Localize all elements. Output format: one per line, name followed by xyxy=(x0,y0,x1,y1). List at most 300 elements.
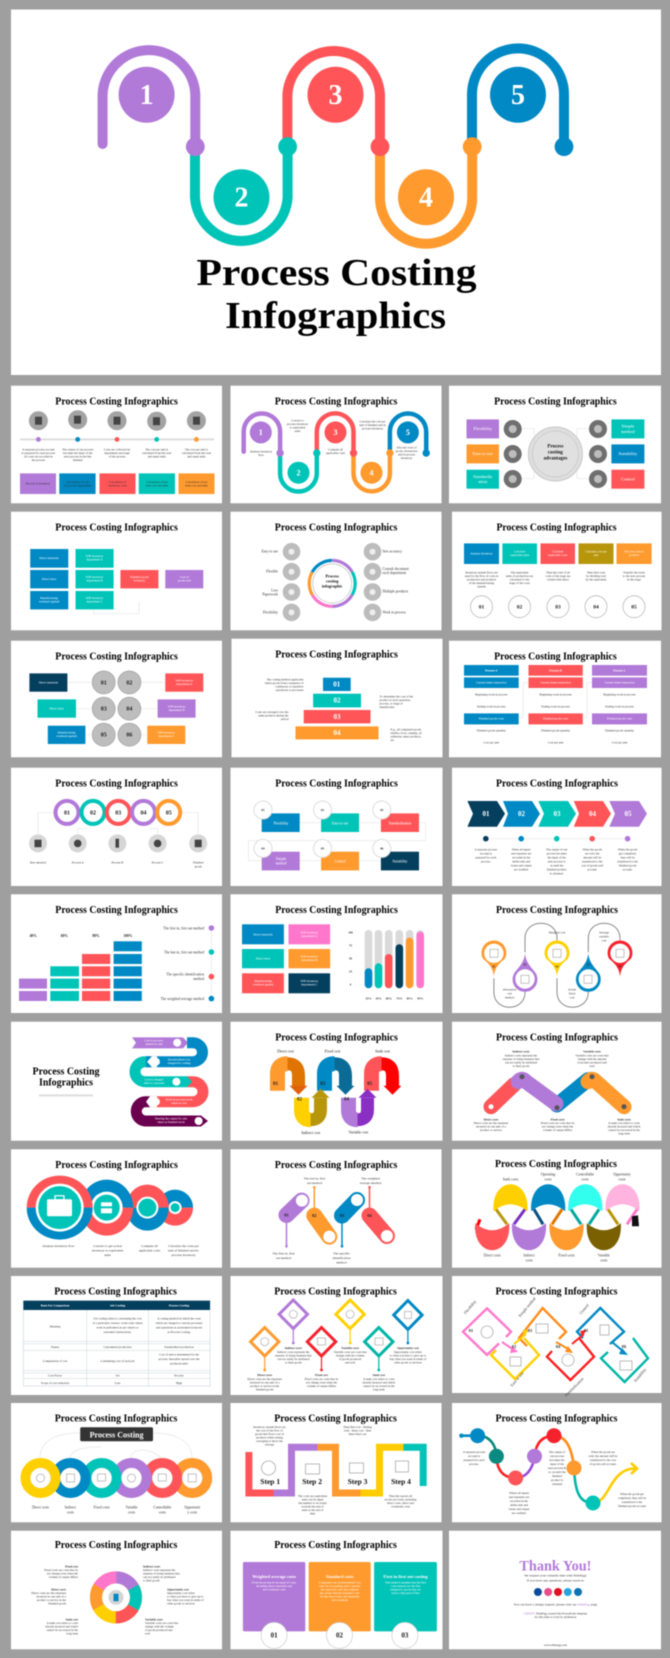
panel: comparison table xyxy=(11,1276,222,1395)
descriptions: and equal units xyxy=(187,455,206,459)
panel: linked rings xyxy=(11,768,222,886)
left boxes: ation xyxy=(478,479,488,484)
top row boxes xyxy=(262,813,419,832)
heading: Process Costing Infographics xyxy=(55,396,178,407)
colored boxes: Record of inventory xyxy=(26,482,51,486)
descriptions: Direct costs are the expenses xyxy=(247,1377,283,1381)
pin numbers: 02 xyxy=(524,962,527,966)
right boxes: department B xyxy=(168,708,185,712)
labels xyxy=(484,1172,631,1262)
text blocks: bottom: product or service xyxy=(480,1128,502,1132)
card 2: Standard costs xyxy=(326,1574,354,1579)
text blocks: top: Variable costs xyxy=(583,1050,602,1054)
purple arrow xyxy=(132,1037,188,1048)
top row boxes: Standardization xyxy=(389,822,411,826)
descriptions xyxy=(247,1346,427,1392)
step notes: average xyxy=(265,1442,275,1446)
step labels: to equivalent xyxy=(290,426,305,430)
left notes: where goods from a sequence of xyxy=(265,681,304,685)
cost labels: Fixed cost xyxy=(325,1050,341,1054)
descriptions: prepared for each xyxy=(475,856,497,860)
descriptions xyxy=(475,848,639,876)
ribbon icons xyxy=(488,1074,626,1110)
labels: costs xyxy=(544,1177,552,1181)
multicolor ring xyxy=(309,560,355,606)
up arrowheads xyxy=(312,1089,376,1098)
pill numbers: 02 xyxy=(312,1213,317,1218)
WIP boxes: WIP inventory xyxy=(86,575,104,579)
credit note xyxy=(524,1612,588,1619)
connectors xyxy=(519,683,592,718)
step labels xyxy=(250,419,418,460)
ribbon numbers: 01 xyxy=(273,1082,278,1087)
left labels: Flexible xyxy=(266,570,278,574)
column: process A: Process A xyxy=(485,669,498,673)
descriptions: as until the xyxy=(550,864,564,868)
text blocks: top: Indirect costs xyxy=(512,1050,530,1054)
path notes: product is xyxy=(551,1478,564,1482)
ring labels: Variable xyxy=(126,1506,138,1510)
pill 02 xyxy=(313,1186,335,1243)
cost of goods box: goods sold xyxy=(178,579,191,583)
hero path: orange arch xyxy=(380,147,472,244)
finished goods box xyxy=(120,570,158,588)
right boxes: department C xyxy=(158,734,174,738)
step notes: these final cost xyxy=(348,1432,367,1436)
pin: red xyxy=(608,940,632,977)
heading: Process Costing Infographics xyxy=(496,522,617,533)
ring caption: infographic xyxy=(322,584,343,589)
left text blocks: cannot be recovered in the xyxy=(46,1628,79,1632)
text blocks: bottom: Direct costs are the expenses xyxy=(474,1121,509,1125)
panel: domes and bowls xyxy=(452,1149,662,1268)
number medallions: 02 xyxy=(336,1632,344,1640)
pin numbers: 01 xyxy=(492,964,496,968)
bar chart: 85% xyxy=(407,996,413,1000)
table rows: process, thereafter spread over the xyxy=(158,1357,200,1362)
chevrons: 03 xyxy=(554,810,561,818)
right text blocks: buy what you want in terms of xyxy=(167,1598,204,1602)
heading xyxy=(32,1067,100,1089)
descriptions: Direct costs xyxy=(257,1373,273,1377)
rotated labels: Control xyxy=(578,1302,590,1315)
left text blocks: Fixed cost xyxy=(65,1565,78,1569)
card 2: the actual with the standard costs xyxy=(320,1591,360,1595)
descriptions: incurred on one unit of a xyxy=(250,1380,280,1384)
icons xyxy=(481,1324,632,1370)
winding path xyxy=(244,413,426,492)
text blocks: top: Variable costs are costs that xyxy=(575,1054,609,1058)
descriptions: used for the flow of costs in xyxy=(465,574,499,578)
rotated labels: Flexibility xyxy=(463,1299,477,1315)
path nodes xyxy=(459,1428,600,1510)
descriptions: Variable costs xyxy=(341,1346,360,1350)
right notes xyxy=(380,695,422,742)
path notes: Where all inputs xyxy=(509,1491,530,1495)
left boxes: Manufacturing xyxy=(58,731,76,735)
card 2: and overhead xyxy=(332,1598,348,1602)
descriptions: the process xyxy=(32,458,46,462)
panel: connected diamonds xyxy=(230,1276,442,1395)
step 1 badge xyxy=(119,67,175,123)
column: process A: Beginning work in process xyxy=(475,693,508,697)
heading: Process Costing Infographics xyxy=(55,1413,177,1424)
panel: folded arrows xyxy=(230,1022,442,1141)
colored boxes xyxy=(20,473,214,494)
input boxes: Manufacturing xyxy=(40,596,58,600)
hero path nodes xyxy=(186,137,573,156)
finished goods box: Finished goods xyxy=(130,575,149,579)
left boxes: Direct labor xyxy=(256,956,270,960)
chevrons: 04 xyxy=(589,810,596,818)
ribbon numbers: 03 xyxy=(320,1082,326,1087)
lower diamonds xyxy=(250,1328,393,1356)
descriptions: already incurred and which xyxy=(362,1380,396,1384)
column: process A xyxy=(464,665,519,745)
table rows: produced units xyxy=(170,1362,189,1366)
descriptions: and equal units xyxy=(148,455,167,459)
colored header boxes: Allocate costs to xyxy=(624,550,644,554)
path notes: completed, they will be xyxy=(618,1496,647,1501)
right text blocks: expense of doing business that xyxy=(143,1572,180,1576)
descriptions: amount will be xyxy=(583,856,602,860)
left text blocks: Direct costs xyxy=(51,1588,67,1592)
column: process C: Process C xyxy=(613,669,626,673)
path notes: obtained xyxy=(552,1482,563,1486)
diamond outlines xyxy=(463,1308,648,1382)
heading: Process Costing Infographics xyxy=(55,905,178,916)
percent labels xyxy=(30,934,133,938)
pyramid tiers: 03 xyxy=(334,713,341,721)
hero title xyxy=(196,252,476,337)
left boxes: overhead applied xyxy=(253,982,274,986)
descriptions: A separate process xyxy=(475,848,498,852)
bar chart: 50 xyxy=(349,957,352,961)
panel: pyramid xyxy=(232,639,442,757)
pill 01 xyxy=(285,1195,308,1248)
pin labels: Marginal cost xyxy=(549,930,565,934)
bottom row boxes: method xyxy=(276,862,287,866)
descriptions: is prepared for each process xyxy=(22,451,56,455)
upper diamonds xyxy=(279,1300,422,1330)
path notes: input of the xyxy=(550,1462,565,1466)
bar chart: 25% xyxy=(366,996,372,1000)
descriptions: can not easily be attributed xyxy=(277,1357,310,1361)
step labels: unit of finished and in xyxy=(359,423,386,427)
descriptions: product or service in the xyxy=(250,1384,280,1388)
step labels: Compute all xyxy=(328,448,343,452)
descriptions: cannot be recovered in the xyxy=(363,1384,395,1388)
colored header boxes: Calculate xyxy=(514,550,526,554)
pin: blue xyxy=(576,953,601,992)
right labels xyxy=(382,550,409,615)
website: www.slideegg.com xyxy=(544,1643,568,1647)
heading: Process Costing Infographics xyxy=(495,1159,617,1170)
table rows: Cost of unit is determined for the xyxy=(159,1352,200,1356)
pill labels xyxy=(272,1176,382,1264)
table rows: customer's instructions. xyxy=(103,1330,132,1334)
text blocks: bottom: incurred on one unit of a xyxy=(476,1125,506,1129)
path notes: finished goods account xyxy=(618,1504,646,1508)
number badges: 06 xyxy=(380,847,384,851)
table rows: and operations is ascertained is known xyxy=(156,1326,203,1330)
pin: purple xyxy=(513,953,537,992)
captions: Analyze inventory flow xyxy=(42,1244,75,1248)
table rows xyxy=(41,1316,203,1385)
left text blocks: not change even when the xyxy=(47,1572,79,1576)
descriptions: finished goods xyxy=(256,1388,274,1392)
text blocks: top: can not easily be attributed xyxy=(505,1061,538,1065)
column: process B: Process B xyxy=(549,669,562,673)
gray icon circles xyxy=(283,543,381,621)
pyramid tiers: 04 xyxy=(334,729,341,737)
colored header boxes: Analyze inventory xyxy=(470,552,493,556)
column: process C: Beginning work in process xyxy=(603,693,636,697)
number badges: 2 xyxy=(296,469,300,478)
table header: Process Costing xyxy=(169,1304,190,1308)
chevrons: 01 xyxy=(482,810,490,818)
ring labels: costs xyxy=(128,1510,136,1514)
number badges: 5 xyxy=(406,428,410,437)
captions: inventory to equivalent xyxy=(92,1248,123,1252)
heading: Process Costing Infographics xyxy=(496,1413,618,1424)
bar chart: 25 xyxy=(349,970,352,974)
ring labels: Indirect xyxy=(65,1506,76,1510)
colored boxes: Calculation of xyxy=(109,480,126,484)
center circle: advantages xyxy=(543,457,567,462)
descriptions: debits side and xyxy=(512,860,531,864)
step notes: time xyxy=(310,1512,316,1516)
WIP boxes: department B xyxy=(86,579,103,583)
numbers: 06 xyxy=(622,1344,627,1349)
right boxes: department B xyxy=(301,958,317,962)
descriptions: to what you have to give up to xyxy=(390,1354,427,1358)
WIP boxes: department A xyxy=(86,558,103,562)
input boxes: overhead applied xyxy=(39,600,60,604)
pill labels: The weighted xyxy=(361,1176,380,1180)
card 3: costs entered are the first xyxy=(390,1584,421,1588)
panel: interlocked rings xyxy=(11,1403,222,1522)
ring centers xyxy=(30,1468,202,1488)
cost labels: Indirect cost xyxy=(301,1131,321,1135)
left text blocks: already incurred and which xyxy=(45,1625,78,1629)
right labels: Multiple products xyxy=(382,590,409,594)
top row boxes: Flexibility xyxy=(274,822,289,826)
stacked block chart xyxy=(19,941,142,1001)
white step circles xyxy=(152,1039,203,1125)
ribbon captions: related by unit xyxy=(145,1042,163,1046)
number medallions: 03 xyxy=(401,1632,409,1640)
pin numbers: 05 xyxy=(618,964,622,968)
colored header boxes: Calculate xyxy=(552,550,564,554)
left text blocks: A sunk cost refers to costs xyxy=(47,1621,79,1625)
pin labels: Absorption xyxy=(503,987,517,991)
path notes: and expenses are xyxy=(509,1495,530,1499)
step notes xyxy=(253,1425,417,1516)
heading: Process Costing Infographics xyxy=(494,396,617,407)
step 4 badge: 4 xyxy=(419,183,433,214)
pin numbers: 04 xyxy=(587,962,590,966)
left text blocks: Sunk cost xyxy=(66,1618,78,1622)
descriptions: costs of the stage are xyxy=(546,574,571,578)
panel: teardrop pins xyxy=(452,894,662,1013)
step 5 badge: 5 xyxy=(511,80,525,111)
right boxes: WIP inventory xyxy=(300,930,319,934)
heading: Infographics xyxy=(39,1078,93,1089)
number badges: 01 xyxy=(261,808,265,812)
numbers: 03 xyxy=(528,1328,533,1333)
left boxes: Standardiz xyxy=(473,474,492,479)
table header: Basis For Comparison xyxy=(41,1304,70,1308)
step labels: Step 4 xyxy=(391,1477,411,1486)
descriptions: next process in the line xyxy=(64,455,92,459)
step 1 badge: 1 xyxy=(140,80,154,111)
timeline dots xyxy=(483,836,630,842)
descriptions: finished goods xyxy=(619,864,637,868)
heading: Process Costing Infographics xyxy=(275,522,398,533)
bar chart: 75 xyxy=(349,944,352,948)
path notes: When the goods get xyxy=(620,1492,644,1496)
table header xyxy=(23,1301,210,1310)
step notes: total - these cost - then xyxy=(344,1428,372,1432)
bar chart: 100 xyxy=(348,931,353,935)
card 3: This method assumes that the first xyxy=(385,1581,426,1585)
step 5 badge xyxy=(490,67,546,123)
left boxes: Flexibility xyxy=(473,426,493,431)
WIP boxes: department C xyxy=(86,600,103,604)
panel: circular infographic xyxy=(230,512,442,630)
connectors xyxy=(521,429,590,479)
right text blocks: of goods produced and xyxy=(145,1628,173,1632)
connectors xyxy=(68,682,165,735)
descriptions: cost of goods sold xyxy=(581,864,604,868)
descriptions: recorded in the xyxy=(512,856,531,860)
chevrons: 02 xyxy=(518,810,526,818)
text blocks: bottom xyxy=(474,1118,641,1136)
right labels: Consult document xyxy=(382,567,409,571)
pill labels: out method xyxy=(276,1256,291,1260)
descriptions: are credited. xyxy=(514,868,529,872)
labels: Sunk costs xyxy=(503,1177,519,1181)
table header: Job Costing xyxy=(110,1304,126,1308)
right labels: Sets accuracy xyxy=(382,550,402,554)
descriptions: account. xyxy=(587,868,597,872)
heading: Process Costing Infographics xyxy=(496,905,618,916)
right text blocks: Opportunity cost refers xyxy=(167,1591,196,1595)
number medallions xyxy=(261,1622,418,1648)
timeline xyxy=(20,437,214,442)
heading: Process Costing xyxy=(32,1067,100,1078)
left notes xyxy=(255,678,304,721)
ring labels: Opportunit xyxy=(184,1506,200,1510)
heading: Process Costing Infographics xyxy=(55,1540,177,1551)
left text blocks: finished goods xyxy=(48,1602,67,1606)
descriptions: all costs are recorded in xyxy=(24,455,53,459)
path nodes xyxy=(276,449,430,457)
numbered circle pairs xyxy=(92,671,141,746)
stem dots xyxy=(263,1342,409,1371)
hero path: red arch xyxy=(287,51,380,146)
center circle xyxy=(528,427,582,481)
panel: three process columns xyxy=(449,641,661,757)
path notes: When the goods are xyxy=(591,1450,616,1454)
card 3 xyxy=(374,1562,437,1631)
left labels: Easy to use xyxy=(262,550,278,554)
card 2: the expected costs and compare xyxy=(321,1588,359,1592)
pill labels: out method xyxy=(307,1181,322,1185)
numbered circle pairs: 03 xyxy=(101,707,107,713)
panel: snake ribbon xyxy=(11,1022,222,1141)
descriptions: When the goods xyxy=(582,848,603,852)
heading: Process Costing Infographics xyxy=(496,778,618,789)
hero path: teal arch xyxy=(195,147,288,241)
chevrons: 05 xyxy=(624,810,632,818)
panel: cost flow boxes xyxy=(11,512,222,630)
ribbon captions: Cost is charged xyxy=(145,1078,164,1082)
table rows: Job costing refers to calculating the cost xyxy=(93,1316,142,1320)
arches: dark half xyxy=(288,1064,392,1087)
numbers: 02 xyxy=(512,1344,516,1349)
connecting gray arcs xyxy=(494,923,620,1007)
path notes: one process xyxy=(550,1454,565,1458)
labels: costs xyxy=(618,1177,626,1181)
path notes: account is xyxy=(468,1454,481,1458)
descriptions xyxy=(465,571,646,589)
right boxes: Suitability xyxy=(619,451,638,456)
number badges xyxy=(254,801,391,857)
table rows: High xyxy=(176,1381,182,1385)
winding path xyxy=(461,1436,637,1503)
descriptions: of goods produced xyxy=(339,1357,362,1361)
cost of goods box: Cost of xyxy=(180,575,189,579)
pill numbers: 01 xyxy=(284,1212,290,1217)
step labels: Step 2 xyxy=(302,1477,322,1486)
number badges: 02 xyxy=(321,808,324,812)
panel: inputs, numbered circles, WIP xyxy=(11,641,222,757)
method legend: The first in, first out method xyxy=(163,926,204,931)
heading: Process Costing Infographics xyxy=(274,1413,397,1424)
right text blocks: Variable costs are costs that xyxy=(145,1621,178,1625)
panel: boxes and bar chart xyxy=(230,894,442,1013)
bottom row boxes: Control xyxy=(335,860,346,864)
table rows: Cost Factor xyxy=(48,1374,62,1378)
captions: Calculate the costs per xyxy=(168,1244,200,1248)
text blocks: top: to final goods xyxy=(513,1064,530,1068)
number circles: 05 xyxy=(631,605,637,611)
text blocks: bottom: Fixed costs are costs that do xyxy=(541,1121,575,1125)
process costing tag xyxy=(80,1427,153,1441)
descriptions: expense of doing business that xyxy=(275,1354,312,1358)
path notes: of goods sold account. xyxy=(590,1462,617,1466)
numbered circle pairs: 04 xyxy=(126,707,132,713)
descriptions: to the next process xyxy=(623,574,646,578)
table rows: as Process Costing. xyxy=(167,1330,191,1334)
left notes: continuous or repetitive xyxy=(275,685,304,689)
ribbon rows xyxy=(135,1043,203,1121)
stage labels: Finished xyxy=(193,861,204,865)
numbered circle pairs: 05 xyxy=(101,733,107,739)
descriptions: Indirect costs xyxy=(285,1346,303,1350)
ribbon captions: taken as finished stock xyxy=(157,1120,185,1124)
left boxes: Direct materials xyxy=(39,681,59,685)
descriptions: production and products xyxy=(467,578,497,582)
right boxes xyxy=(288,924,330,993)
chevrons xyxy=(467,801,647,827)
number badges: 1 xyxy=(259,428,263,437)
descriptions: calculated to the xyxy=(510,578,530,582)
step labels: Analyze inventory xyxy=(250,450,273,454)
ring numbers: 01 xyxy=(64,811,70,817)
